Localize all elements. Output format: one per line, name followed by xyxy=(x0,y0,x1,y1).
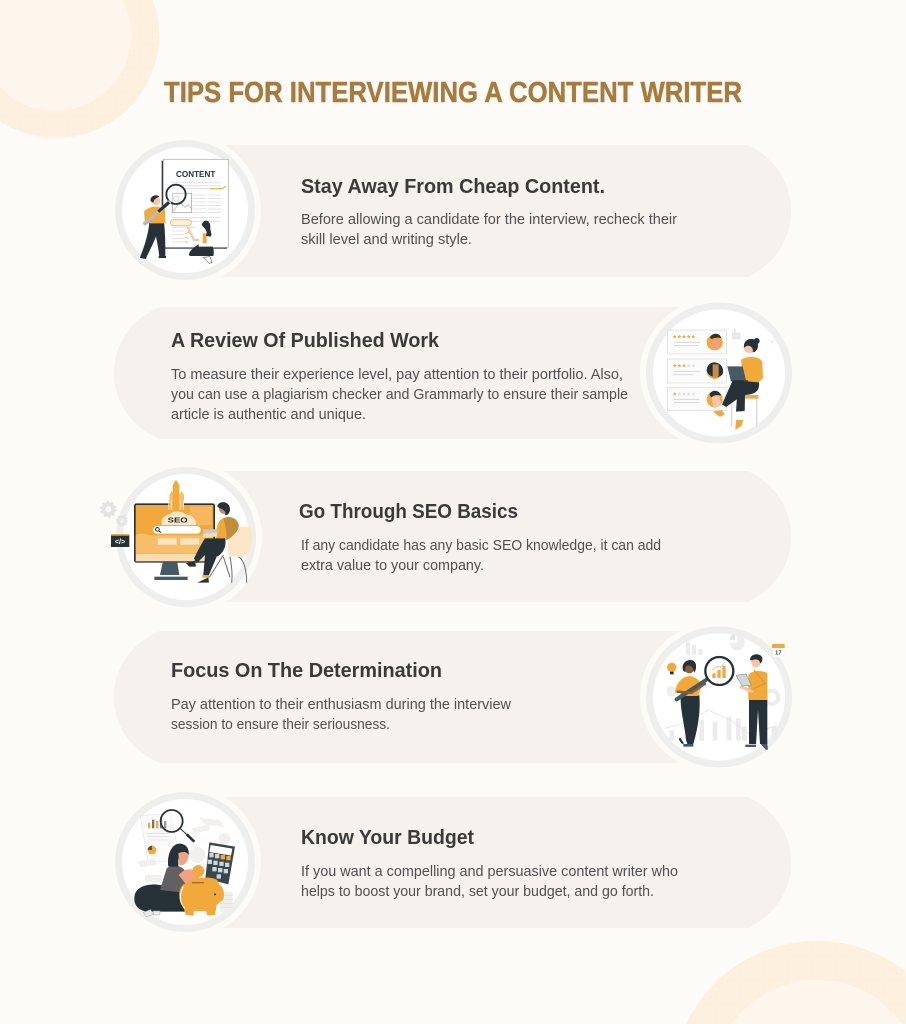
body text: tip 1 xyxy=(301,212,677,248)
body text: tip 1: Before allowing a candidate for the interview, recheck their xyxy=(301,212,677,228)
panel: stay away from cheap content xyxy=(109,134,791,286)
body text: tip 2: you can use a plagiarism checker and Grammarly to ensure their sample xyxy=(171,387,628,403)
body text: tip 2: article is authentic and unique. xyxy=(171,407,366,423)
title: TIPS FOR INTERVIEWING A CONTENT WRITER xyxy=(164,77,742,109)
body text: tip 5 xyxy=(301,864,678,900)
body text: tip 4: Pay attention to their enthusiasm during the interview xyxy=(171,697,511,713)
icon: man at monitor with seo rocket: </> xyxy=(115,537,125,546)
icon: people reviewing content document xyxy=(140,159,228,263)
body text: tip 3: extra value to your company. xyxy=(301,558,484,574)
panel: a review of published work xyxy=(114,297,798,449)
heading: tip 3: Go Through SEO Basics xyxy=(299,500,518,523)
icon: man at monitor with seo rocket xyxy=(101,480,252,583)
body text: tip 3: If any candidate has any basic SEO knowledge, it can add xyxy=(301,538,661,554)
body text: tip 4 xyxy=(171,697,511,733)
panel: go through seo basics xyxy=(101,461,791,613)
body text: tip 4: session to ensure their seriousness. xyxy=(171,717,390,733)
icon: woman with laptop and star reviews xyxy=(667,328,774,430)
icon: two people analysing a chart with magnifier: 17 xyxy=(775,651,781,657)
decorative corner circle: top left xyxy=(0,0,159,138)
icon: people reviewing content document: CONTENT xyxy=(176,170,215,179)
heading: tip 1: Stay Away From Cheap Content. xyxy=(301,175,605,198)
icon: woman saving money in piggy bank xyxy=(134,810,235,917)
body text: tip 2: To measure their experience level, pay attention to their portfolio. Also, xyxy=(171,367,623,383)
panel: know your budget xyxy=(109,786,791,938)
body text: tip 2 xyxy=(171,367,628,423)
icon: two people analysing a chart with magnifier xyxy=(665,634,785,750)
decorative corner circle: bottom right xyxy=(686,941,906,1024)
body text: tip 5: helps to boost your brand, set your budget, and go forth. xyxy=(301,884,654,900)
heading: tip 5: Know Your Budget xyxy=(301,826,474,849)
panel: focus on the determination xyxy=(114,621,798,773)
body text: tip 3 xyxy=(301,538,661,574)
heading: tip 4: Focus On The Determination xyxy=(171,659,442,682)
heading: tip 2: A Review Of Published Work xyxy=(171,329,440,352)
icon: man at monitor with seo rocket: SEO xyxy=(168,515,188,524)
body text: tip 5: If you want a compelling and persuasive content writer who xyxy=(301,864,678,880)
body text: tip 1: skill level and writing style. xyxy=(301,232,472,248)
